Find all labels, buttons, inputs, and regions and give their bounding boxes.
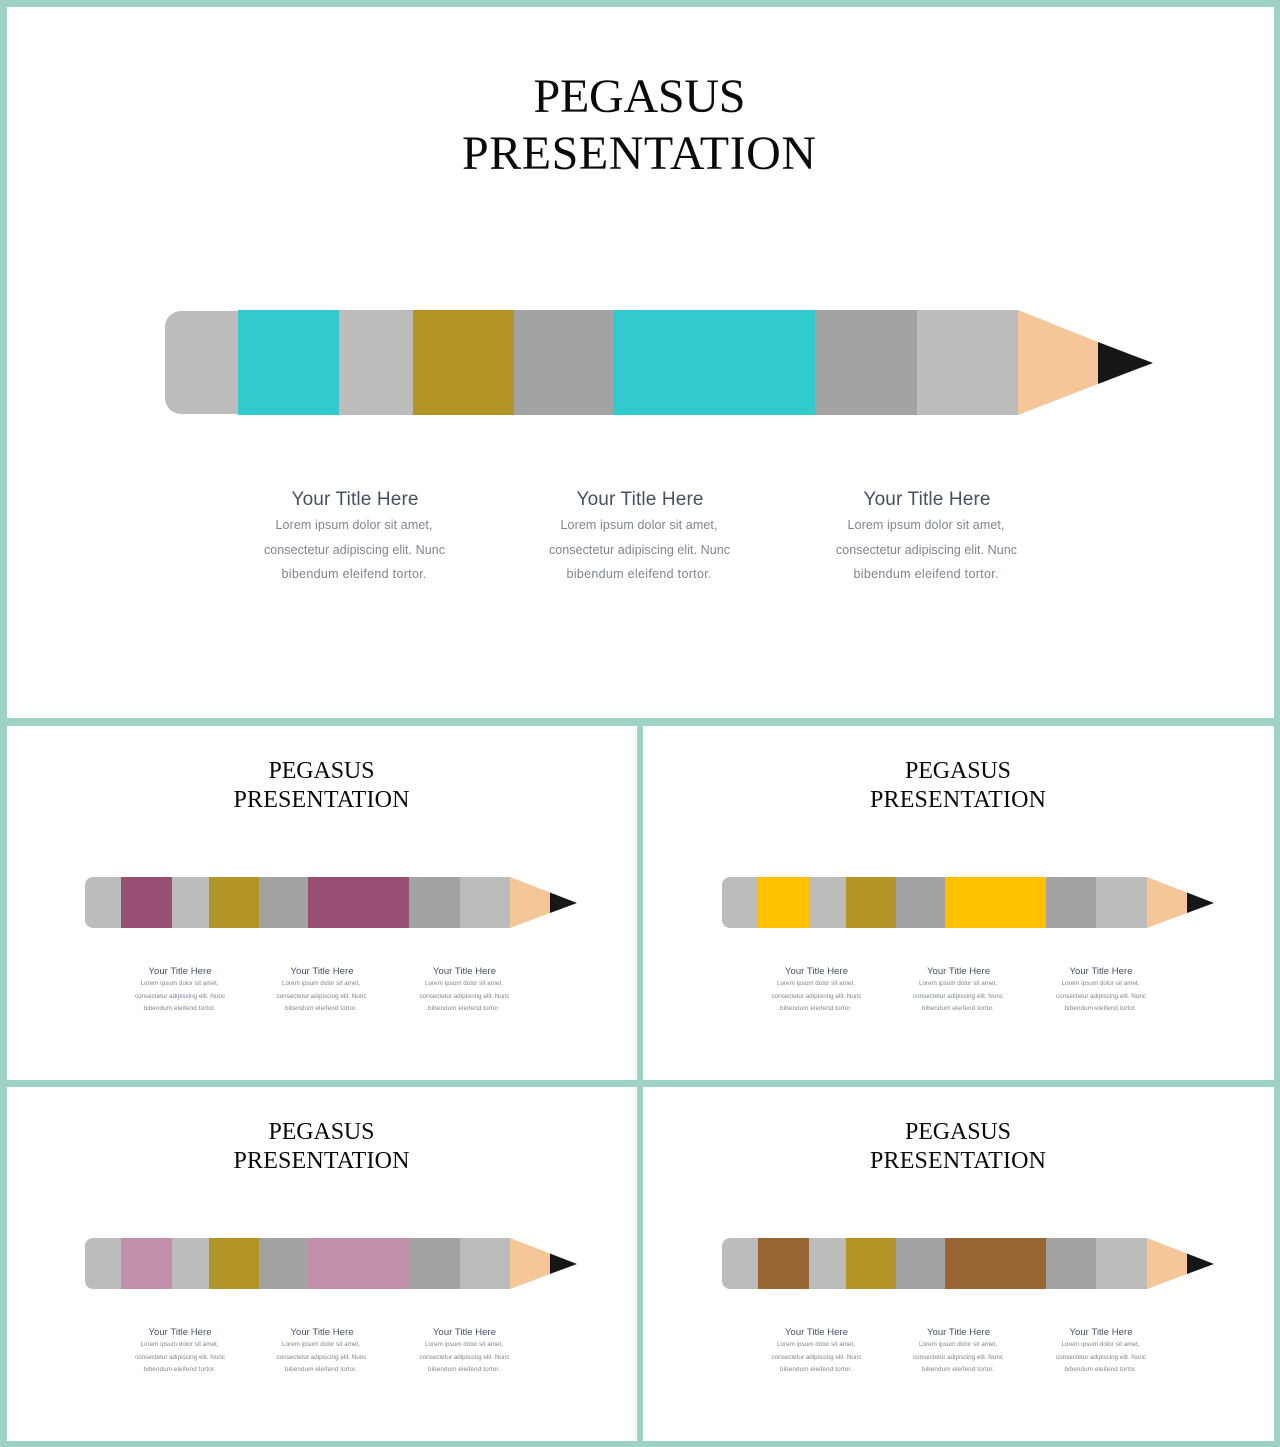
title: PRESENTATION xyxy=(462,127,816,180)
text blocks xyxy=(135,966,510,1012)
text blocks: Lorem ipsum dolor sit amet, xyxy=(777,980,855,987)
title xyxy=(462,70,816,180)
title xyxy=(234,1119,410,1174)
panel: plum pencil slide xyxy=(7,726,637,1080)
text blocks: bibendum eleifend tortor. xyxy=(922,1005,994,1012)
text blocks: consectetur adipiscing elit. Nunc xyxy=(420,1354,510,1361)
text blocks: bibendum eleifend tortor. xyxy=(428,1005,500,1012)
text blocks: Your Title Here xyxy=(148,1327,212,1338)
text blocks: Your Title Here xyxy=(785,1327,848,1338)
text block 1: bibendum eleifend tortor. xyxy=(282,567,426,581)
title xyxy=(870,758,1046,813)
panel: pink pencil slide xyxy=(7,1087,637,1441)
text block 1: consectetur adipiscing elit. Nunc xyxy=(264,543,445,557)
text block 3 xyxy=(836,489,1017,581)
text blocks: consectetur adipiscing elit. Nunc xyxy=(135,1354,225,1361)
text blocks: Your Title Here xyxy=(785,966,848,977)
text blocks: Lorem ipsum dolor sit amet, xyxy=(1062,980,1140,987)
text blocks: consectetur adipiscing elit. Nunc xyxy=(772,1354,862,1361)
text block 3: Your Title Here xyxy=(864,489,990,510)
text blocks: consectetur adipiscing elit. Nunc xyxy=(1056,1354,1146,1361)
text block 3: Lorem ipsum dolor sit amet, xyxy=(848,518,1004,532)
text block 1 xyxy=(264,489,445,581)
text blocks: Lorem ipsum dolor sit amet, xyxy=(919,980,997,987)
text blocks: consectetur adipiscing elit. Nunc xyxy=(276,1354,366,1361)
pencil xyxy=(85,1238,577,1289)
text blocks: Lorem ipsum dolor sit amet, xyxy=(1062,1341,1140,1348)
text blocks: Your Title Here xyxy=(433,966,496,977)
text blocks: bibendum eleifend tortor. xyxy=(428,1366,500,1373)
text blocks: bibendum eleifend tortor. xyxy=(1064,1005,1137,1012)
text blocks: Lorem ipsum dolor sit amet, xyxy=(282,1341,360,1348)
text blocks: Your Title Here xyxy=(290,1327,354,1338)
title: PEGASUS xyxy=(905,758,1011,784)
text blocks: Your Title Here xyxy=(927,1327,990,1338)
text blocks: consectetur adipiscing elit. Nunc xyxy=(1056,993,1146,1000)
text blocks: bibendum eleifend tortor. xyxy=(285,1005,357,1012)
text blocks: Your Title Here xyxy=(1070,1327,1132,1338)
text blocks: Your Title Here xyxy=(927,966,990,977)
text blocks xyxy=(772,1327,1146,1373)
text block 3: consectetur adipiscing elit. Nunc xyxy=(836,543,1017,557)
text blocks xyxy=(135,1327,510,1373)
title: PRESENTATION xyxy=(870,787,1046,813)
text blocks: bibendum eleifend tortor. xyxy=(780,1005,852,1012)
text blocks: consectetur adipiscing elit. Nunc xyxy=(135,993,225,1000)
pencil xyxy=(722,877,1214,928)
text blocks xyxy=(772,966,1146,1012)
title: PRESENTATION xyxy=(870,1148,1046,1174)
text blocks: consectetur adipiscing elit. Nunc xyxy=(420,993,510,1000)
title: PEGASUS xyxy=(268,758,374,784)
pencil xyxy=(165,310,1153,415)
text blocks: Lorem ipsum dolor sit amet, xyxy=(919,1341,997,1348)
text blocks: Your Title Here xyxy=(433,1327,496,1338)
text blocks: Lorem ipsum dolor sit amet, xyxy=(425,1341,503,1348)
title: PRESENTATION xyxy=(234,787,410,813)
panel: yellow pencil slide xyxy=(643,726,1274,1080)
text blocks: bibendum eleifend tortor. xyxy=(922,1366,994,1373)
text block 1: Your Title Here xyxy=(292,489,418,510)
text blocks: Your Title Here xyxy=(290,966,354,977)
pencil xyxy=(85,877,577,928)
text block 3: bibendum eleifend tortor. xyxy=(854,567,998,581)
text block 2: bibendum eleifend tortor. xyxy=(566,567,712,581)
text blocks: Lorem ipsum dolor sit amet, xyxy=(425,980,503,987)
title xyxy=(870,1119,1046,1174)
text blocks: consectetur adipiscing elit. Nunc xyxy=(913,1354,1003,1361)
text blocks: Lorem ipsum dolor sit amet, xyxy=(282,980,360,987)
text block 1: Lorem ipsum dolor sit amet, xyxy=(276,518,432,532)
title xyxy=(234,758,410,813)
text blocks: consectetur adipiscing elit. Nunc xyxy=(913,993,1003,1000)
title: PRESENTATION xyxy=(234,1148,410,1174)
text block 2: Lorem ipsum dolor sit amet, xyxy=(560,518,718,532)
text blocks: Lorem ipsum dolor sit amet, xyxy=(777,1341,855,1348)
text blocks: bibendum eleifend tortor. xyxy=(144,1005,216,1012)
text block 2: consectetur adipiscing elit. Nunc xyxy=(549,543,730,557)
text blocks: Your Title Here xyxy=(1070,966,1132,977)
text blocks: bibendum eleifend tortor. xyxy=(780,1366,852,1373)
text blocks: Lorem ipsum dolor sit amet, xyxy=(140,980,219,987)
text block 2 xyxy=(549,489,730,581)
panel: large teal pencil slide xyxy=(7,7,1274,718)
pencil xyxy=(722,1238,1214,1289)
text blocks: consectetur adipiscing elit. Nunc xyxy=(772,993,862,1000)
text blocks: consectetur adipiscing elit. Nunc xyxy=(276,993,366,1000)
text blocks: bibendum eleifend tortor. xyxy=(1064,1366,1137,1373)
title: PEGASUS xyxy=(534,70,746,123)
text block 2: Your Title Here xyxy=(576,489,704,510)
title: PEGASUS xyxy=(268,1119,374,1145)
title: PEGASUS xyxy=(905,1119,1011,1145)
text blocks: Lorem ipsum dolor sit amet, xyxy=(140,1341,219,1348)
text blocks: bibendum eleifend tortor. xyxy=(144,1366,216,1373)
panel: brown pencil slide xyxy=(643,1087,1274,1441)
text blocks: Your Title Here xyxy=(148,966,212,977)
text blocks: bibendum eleifend tortor. xyxy=(285,1366,357,1373)
